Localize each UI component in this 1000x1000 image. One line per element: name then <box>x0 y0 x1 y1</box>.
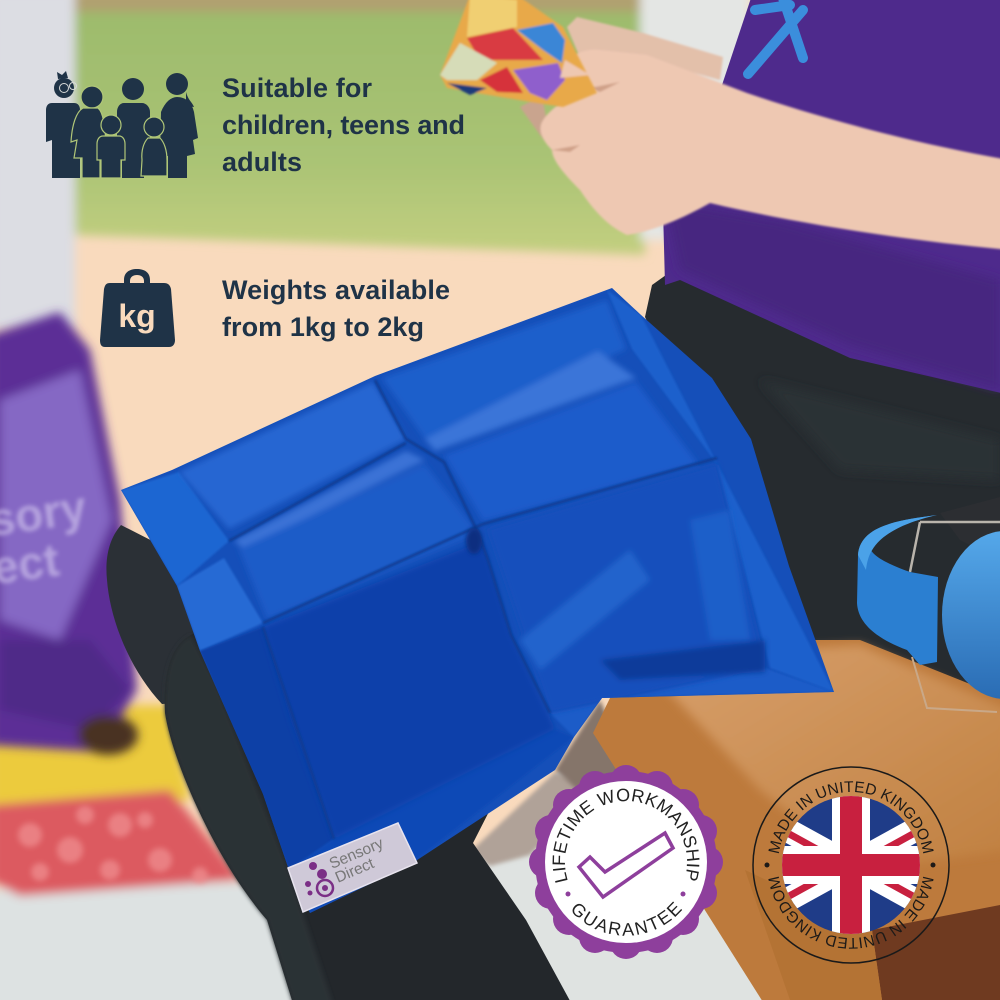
badge text <box>552 788 700 936</box>
arms and hands <box>520 17 1000 250</box>
boy with glasses <box>46 71 80 178</box>
seams <box>229 380 717 839</box>
icon: kg weight: kg <box>118 298 156 334</box>
purple t-shirt <box>662 0 1000 395</box>
text: suitable for: Suitable for <box>222 73 372 103</box>
upper leg <box>106 525 240 704</box>
ring text: MADE IN UNITED KINGDOM <box>768 781 934 854</box>
text: suitable for: children, teens and <box>222 110 465 140</box>
text: suitable for: adults <box>222 147 302 177</box>
quilted pockets <box>179 300 765 839</box>
woman <box>71 86 167 178</box>
sensory direct label: Sensory <box>327 835 386 873</box>
headband cup <box>857 515 938 665</box>
floor by the legs <box>470 700 770 1000</box>
tall woman <box>160 73 198 178</box>
small child <box>97 115 125 178</box>
lower leg <box>165 600 575 1000</box>
sensory direct label <box>288 823 417 912</box>
ring text: MADE IN UNITED KINGDOM <box>768 876 934 949</box>
text: weights: Weights available <box>222 275 450 305</box>
badge text: GUARANTEE <box>572 902 682 936</box>
badge: made in united kingdom <box>752 766 950 964</box>
wooden bench <box>593 640 1000 1000</box>
union flag <box>782 796 920 934</box>
patchwork bean bag <box>440 0 597 107</box>
check mark <box>579 833 673 897</box>
man <box>117 78 150 178</box>
purple bag <box>0 312 138 755</box>
icon: family <box>46 71 198 178</box>
text: suitable for <box>222 73 465 177</box>
bag logo text <box>0 481 96 605</box>
ring text <box>768 781 934 949</box>
jeans hip <box>645 265 1000 710</box>
hems <box>121 472 229 586</box>
blue toy on shirt <box>748 0 803 74</box>
text: weights <box>222 275 450 342</box>
sensory direct label: Direct <box>333 855 377 887</box>
badge text: LIFETIME WORKMANSHIP <box>552 788 700 883</box>
icon: kg weight <box>100 269 175 347</box>
girl <box>141 117 167 176</box>
blue weighted lap pad <box>121 288 834 913</box>
rug texture <box>18 806 208 883</box>
text: weights: from 1kg to 2kg <box>222 312 424 342</box>
ear defenders <box>857 497 1000 712</box>
badge: lifetime workmanship guarantee <box>529 765 723 959</box>
